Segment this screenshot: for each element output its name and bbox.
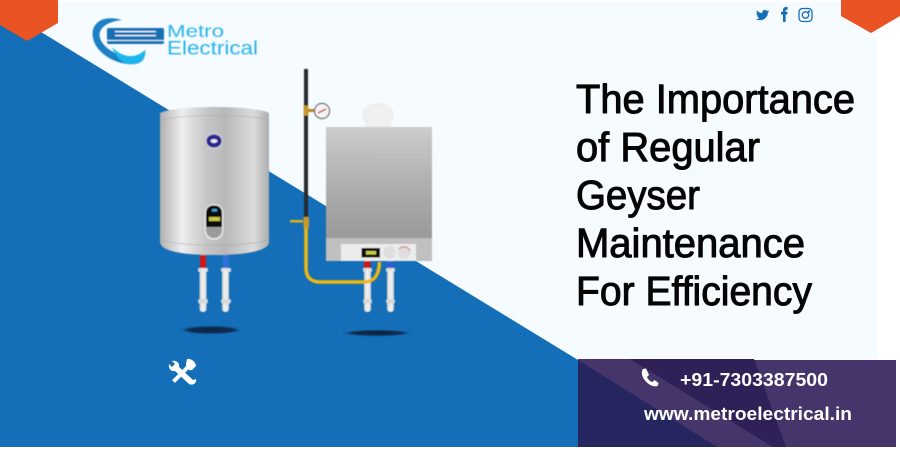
logo wordmark: Electrical xyxy=(167,38,258,60)
panel dark facet xyxy=(630,359,786,447)
panel navy facet xyxy=(578,360,717,447)
logo air conditioner xyxy=(107,28,164,44)
wall boiler xyxy=(290,69,432,336)
icon: tools xyxy=(169,359,196,385)
icon: instagram xyxy=(799,8,812,22)
pressure gauge xyxy=(314,104,330,118)
logo swoosh xyxy=(93,18,145,64)
tank inlet pipes xyxy=(198,255,231,312)
logo xyxy=(93,18,258,64)
title: Geyser xyxy=(576,172,700,218)
shadow under boiler xyxy=(340,330,414,336)
icon: twitter xyxy=(756,10,770,20)
title: of Regular xyxy=(576,124,760,170)
icon: facebook xyxy=(781,7,788,22)
title: Maintenance xyxy=(576,220,805,266)
shadow under tank xyxy=(178,326,244,334)
boiler flue xyxy=(362,103,394,127)
water heater tank xyxy=(160,107,269,334)
panel background xyxy=(578,359,896,447)
tank body xyxy=(160,107,269,255)
blue diagonal shape xyxy=(0,7,578,447)
orange ribbon: right xyxy=(841,0,900,33)
tank control display xyxy=(204,204,224,240)
orange ribbon: left xyxy=(0,0,58,41)
icon: phone xyxy=(642,368,658,386)
contact panel xyxy=(578,359,896,447)
boiler control panel xyxy=(341,244,416,261)
title xyxy=(576,76,855,314)
logo wordmark: Metro xyxy=(167,21,224,41)
gas pipe xyxy=(290,69,380,282)
social icons xyxy=(756,7,812,22)
title: For Efficiency xyxy=(576,268,812,314)
boiler outlet pipes xyxy=(363,261,395,312)
boiler body xyxy=(326,127,432,261)
website: www.metroelectrical.in xyxy=(643,404,852,424)
title: The Importance xyxy=(576,76,855,122)
phone number: +91-7303387500 xyxy=(680,370,828,390)
tank badge xyxy=(205,132,223,150)
